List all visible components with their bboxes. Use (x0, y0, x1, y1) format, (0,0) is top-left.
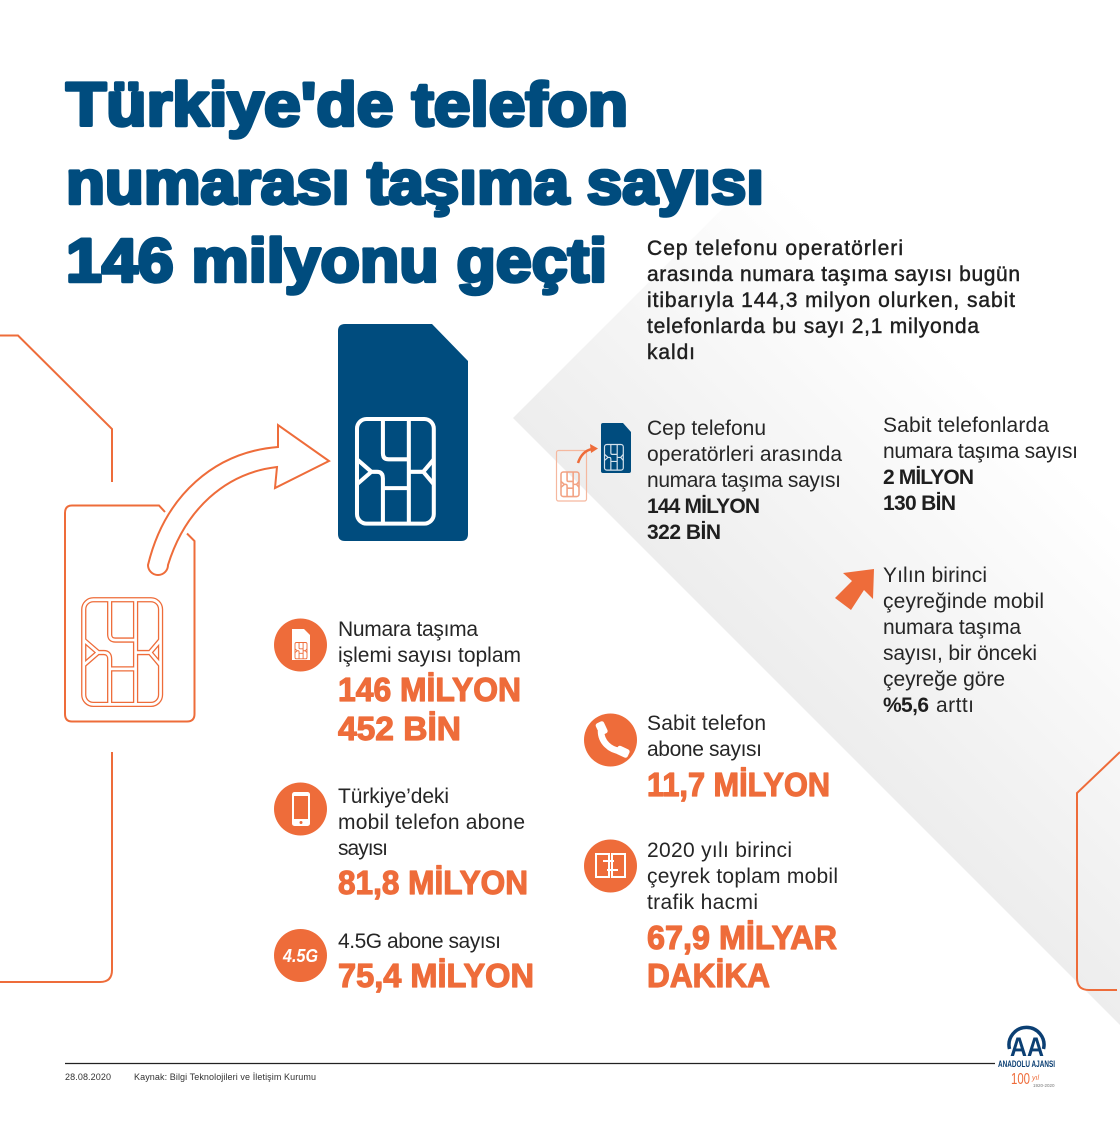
icon: small SIM transfer (556, 423, 631, 501)
stat: 4.5G subscribers: 4.5G abone sayısı (338, 930, 501, 953)
text: mobile porting count: operatörleri arasında (647, 443, 842, 466)
text: fixed-line porting count (883, 414, 1078, 515)
text: fixed-line porting count: 130 BİN (883, 492, 956, 515)
stat: 4.5G subscribers: 75,4 MİLYON (338, 957, 534, 994)
logo: Anadolu Ajansı: ANADOLU AJANSI (998, 1059, 1055, 1070)
stat: mobile subscribers: mobil telefon abone (338, 811, 525, 834)
icon: outlined SIM card (65, 506, 194, 722)
large background SIM outline right (1077, 752, 1120, 990)
icon: 4.5G circle: 4.5G (282, 946, 318, 966)
stat: total porting: 146 MİLYON (338, 671, 521, 708)
title: Türkiye'de telefon (66, 70, 628, 138)
intro paragraph: arasında numara taşıma sayısı bugün (647, 263, 1020, 286)
stat: total porting: Numara taşıma (338, 618, 478, 641)
stat: mobile traffic: trafik hacmi (647, 891, 758, 914)
stat: fixed-line subscribers (647, 712, 830, 803)
text: quarterly increase: numara taşıma (883, 616, 1021, 639)
logo: Anadolu Ajansı: yıl (1031, 1075, 1039, 1082)
logo: Anadolu Ajansı: AA (1010, 1032, 1044, 1062)
background shadow (513, 91, 1120, 1025)
stat: mobile traffic: DAKİKA (647, 957, 770, 994)
stat: mobile subscribers: Türkiye’deki (338, 785, 449, 808)
footer rule (65, 1062, 995, 1064)
text: quarterly increase: sayısı, bir önceki (883, 642, 1037, 665)
icon: handset circle (584, 714, 637, 766)
intro paragraph: itibarıyla 144,3 milyon olurken, sabit (647, 289, 1015, 312)
stat: mobile subscribers (338, 785, 528, 901)
intro paragraph (647, 237, 1020, 364)
arrow: curved to blue SIM (148, 425, 329, 575)
footer date and source: Kaynak: Bilgi Teknolojileri ve İletişim Kurumu (134, 1072, 316, 1082)
text: quarterly increase: Yılın birinci (883, 564, 987, 587)
text: mobile porting count: numara taşıma sayısı (647, 469, 841, 492)
footer date and source: 28.08.2020 (65, 1072, 111, 1082)
text: quarterly increase: çeyreğe göre (883, 668, 1005, 691)
text: quarterly increase (883, 564, 1044, 717)
stat: fixed-line subscribers: abone sayısı (647, 738, 762, 761)
icon: up-right arrow (835, 569, 874, 610)
stat: fixed-line subscribers: 11,7 MİLYON (647, 766, 830, 803)
stat: mobile traffic: 2020 yılı birinci (647, 839, 792, 862)
title (66, 70, 764, 294)
stat: mobile traffic: 67,9 MİLYAR (647, 919, 837, 956)
text: fixed-line porting count: numara taşıma sayısı (883, 440, 1078, 463)
stat: mobile subscribers: 81,8 MİLYON (338, 864, 528, 901)
logo: Anadolu Ajansı: 1920-2020 (1033, 1083, 1055, 1088)
text: quarterly increase: %5,6 (883, 694, 929, 717)
stat: total porting: işlemi sayısı toplam (338, 644, 521, 667)
icon: 4.5G circle (274, 929, 327, 982)
stat: mobile traffic (647, 839, 838, 994)
intro paragraph: Cep telefonu operatörleri (647, 237, 903, 260)
text: mobile porting count: Cep telefonu (647, 417, 766, 440)
text: mobile porting count: 144 MİLYON (647, 495, 760, 518)
stat: fixed-line subscribers: Sabit telefon (647, 712, 766, 735)
large background SIM outline left (0, 336, 112, 982)
intro paragraph: kaldı (647, 341, 695, 364)
text: quarterly increase: arttı (936, 694, 974, 717)
title: 146 milyonu geçti (66, 226, 607, 294)
stat: total porting (338, 618, 521, 747)
title: numarası taşıma sayısı (66, 148, 764, 216)
stat: total porting: 452 BİN (338, 710, 461, 747)
text: mobile porting count: 322 BİN (647, 521, 721, 544)
intro paragraph: telefonlarda bu sayı 2,1 milyonda (647, 315, 979, 338)
icon: SIM circle (274, 618, 327, 672)
text: fixed-line porting count: 2 MİLYON (883, 466, 974, 489)
text: mobile porting count (647, 417, 842, 544)
logo: Anadolu Ajansı (998, 1027, 1055, 1088)
icon: two phones circle (584, 840, 637, 892)
logo: Anadolu Ajansı: 100 (1011, 1071, 1030, 1088)
icon: large blue SIM card (338, 324, 468, 541)
text: fixed-line porting count: Sabit telefonlarda (883, 414, 1049, 437)
stat: mobile traffic: çeyrek toplam mobil (647, 865, 838, 888)
stat: mobile subscribers: sayısı (338, 837, 388, 860)
text: quarterly increase: çeyreğinde mobil (883, 590, 1044, 613)
stat: 4.5G subscribers (338, 930, 534, 994)
icon: mobile phone circle (274, 782, 327, 836)
